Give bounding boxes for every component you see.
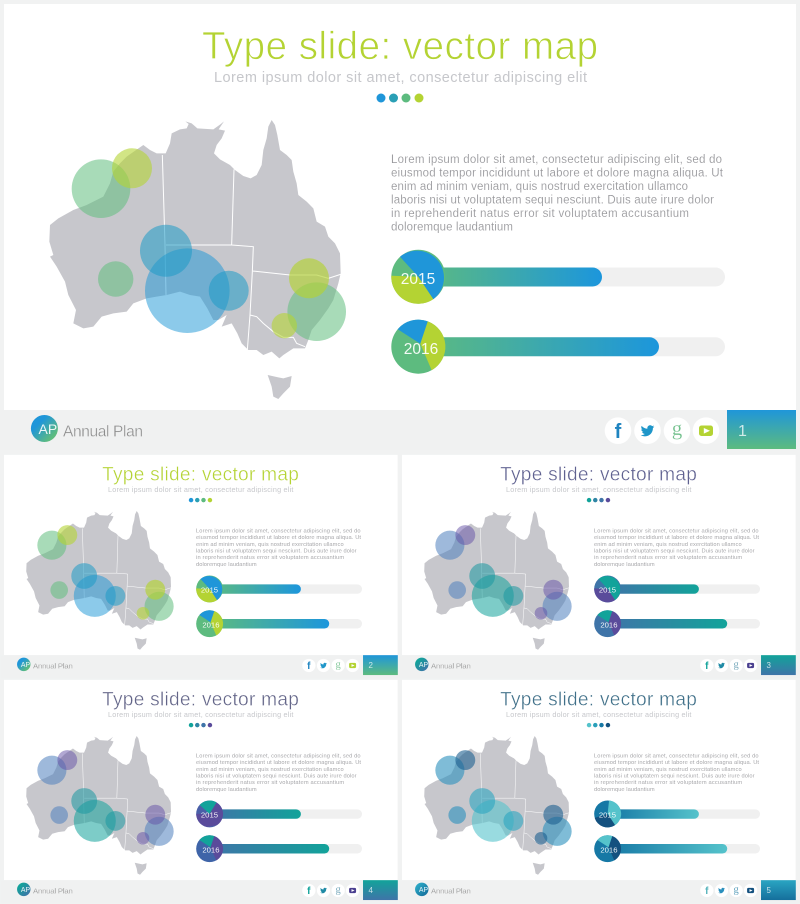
body text: in reprehenderit natus error sit voluptatem accusantium <box>391 208 689 220</box>
body text: Lorem ipsum dolor sit amet, consectetur adipiscing elit, sed do <box>594 528 759 534</box>
progress bar 2015 <box>196 576 362 602</box>
social icons: f <box>307 886 311 897</box>
social icons: g <box>734 660 740 671</box>
body text: enim ad minim veniam, quis nostrud exercitation ullamco <box>594 767 742 773</box>
body text <box>391 154 724 234</box>
social icons: f <box>705 661 709 672</box>
logo <box>31 415 58 442</box>
social icons: f <box>615 421 622 443</box>
body text: doloremque laudantium <box>196 562 257 568</box>
progress bar 2015: 2015 <box>201 586 218 595</box>
body text: in reprehenderit natus error sit voluptatem accusantium <box>594 780 742 786</box>
body text <box>196 753 361 793</box>
body text: laboris nisi ut voluptatem sequi nesciunt. Duis aute irure dolor <box>594 774 755 780</box>
logo: AP <box>419 662 428 669</box>
footer band <box>398 655 800 678</box>
footer band <box>0 655 398 678</box>
logo: AP <box>38 421 57 437</box>
logo: AP <box>21 887 30 894</box>
indicator dots <box>189 498 212 502</box>
indicator dots <box>376 94 424 102</box>
subtitle: Lorem ipsum dolor sit amet, consectetur adipiscing elit <box>108 485 293 494</box>
indicator dots <box>587 498 610 502</box>
progress bar 2016 <box>594 610 760 637</box>
brand name: Annual Plan <box>63 424 143 440</box>
progress bar 2015 <box>594 576 760 602</box>
body text: enim ad minim veniam, quis nostrud exercitation ullamco <box>196 542 344 548</box>
progress bar 2015 <box>196 801 362 827</box>
page number: 2 <box>368 661 373 670</box>
brand name: Annual Plan <box>431 886 471 895</box>
brand name: Annual Plan <box>33 661 73 670</box>
title: Type slide: vector map <box>202 25 598 68</box>
page number <box>761 655 796 675</box>
body text: laboris nisi ut voluptatem sequi nesciunt. Duis aute irure dolor <box>196 549 357 555</box>
panel: slide 3 <box>398 455 800 678</box>
body text: doloremque laudantium <box>196 787 257 793</box>
map of Australia with bubbles <box>26 511 174 650</box>
progress bar 2015: 2015 <box>599 811 616 820</box>
logo: AP <box>21 662 30 669</box>
subtitle: Lorem ipsum dolor sit amet, consectetur adipiscing elit <box>214 70 587 86</box>
body text: Lorem ipsum dolor sit amet, consectetur adipiscing elit, sed do <box>594 753 759 759</box>
social icons: g <box>336 660 342 671</box>
body text: eiusmod tempor incididunt ut labore et dolore magna aliqua. Ut <box>196 535 361 541</box>
title: Type slide: vector map <box>500 465 697 486</box>
footer band <box>0 410 800 450</box>
indicator dots <box>189 723 212 727</box>
map of Australia with bubbles <box>49 120 346 399</box>
body text: eiusmod tempor incididunt ut labore et dolore magna aliqua. Ut <box>594 535 759 541</box>
map of Australia with bubbles <box>26 736 174 875</box>
panel: slide 5 <box>398 680 800 903</box>
body text: enim ad minim veniam, quis nostrud exercitation ullamco <box>594 542 742 548</box>
social icons: f <box>307 661 311 672</box>
progress bar 2016: 2016 <box>404 341 438 358</box>
title: Type slide: vector map <box>102 690 299 711</box>
progress bar 2016 <box>196 835 362 862</box>
body text: doloremque laudantium <box>594 562 655 568</box>
social icons <box>302 659 359 672</box>
body text: Lorem ipsum dolor sit amet, consectetur adipiscing elit, sed do <box>196 753 361 759</box>
page number: 4 <box>368 886 373 895</box>
brand name: Annual Plan <box>431 661 471 670</box>
body text: eiusmod tempor incididunt ut labore et dolore magna aliqua. Ut <box>391 168 724 180</box>
progress bar 2016: 2016 <box>202 620 219 629</box>
social icons: g <box>734 885 740 896</box>
page number <box>363 655 398 675</box>
body text: Lorem ipsum dolor sit amet, consectetur adipiscing elit, sed do <box>196 528 361 534</box>
brand name: Annual Plan <box>33 886 73 895</box>
body text: laboris nisi ut voluptatem sequi nesciunt. Duis aute irure dolor <box>594 549 755 555</box>
footer band <box>0 880 398 903</box>
social icons: g <box>672 416 683 440</box>
logo <box>17 658 30 671</box>
subtitle: Lorem ipsum dolor sit amet, consectetur adipiscing elit <box>108 710 293 719</box>
logo: AP <box>419 887 428 894</box>
body text: doloremque laudantium <box>594 787 655 793</box>
social icons <box>700 659 757 672</box>
page number <box>363 880 398 900</box>
body text: in reprehenderit natus error sit voluptatem accusantium <box>196 780 344 786</box>
body text: enim ad minim veniam, quis nostrud exercitation ullamco <box>391 181 688 193</box>
logo <box>17 883 30 896</box>
body text: doloremque laudantium <box>391 222 513 234</box>
body text: laboris nisi ut voluptatem sequi nesciunt. Duis aute irure dolor <box>391 194 714 206</box>
page number: 3 <box>766 661 771 670</box>
body text: laboris nisi ut voluptatem sequi nesciunt. Duis aute irure dolor <box>196 774 357 780</box>
logo <box>415 658 428 671</box>
map of Australia with bubbles <box>424 511 572 650</box>
logo <box>415 883 428 896</box>
social icons: g <box>336 885 342 896</box>
progress bar 2015 <box>594 801 760 827</box>
progress bar 2015: 2015 <box>599 586 616 595</box>
body text <box>594 753 759 793</box>
progress bar 2016: 2016 <box>600 620 617 629</box>
title: Type slide: vector map <box>102 465 299 486</box>
subtitle: Lorem ipsum dolor sit amet, consectetur adipiscing elit <box>506 485 691 494</box>
progress bar 2016 <box>594 835 760 862</box>
body text: enim ad minim veniam, quis nostrud exercitation ullamco <box>196 767 344 773</box>
progress bar 2016 <box>391 320 725 374</box>
page number <box>727 410 796 449</box>
progress bar 2016: 2016 <box>202 845 219 854</box>
subtitle: Lorem ipsum dolor sit amet, consectetur adipiscing elit <box>506 710 691 719</box>
body text: in reprehenderit natus error sit voluptatem accusantium <box>594 555 742 561</box>
page number <box>761 880 796 900</box>
body text <box>196 528 361 568</box>
social icons <box>700 884 757 897</box>
page number: 5 <box>766 886 771 895</box>
title: Type slide: vector map <box>500 690 697 711</box>
social icons: f <box>705 886 709 897</box>
social icons <box>605 416 719 444</box>
progress bar 2015 <box>391 250 725 304</box>
panel: slide 4 <box>0 680 398 903</box>
progress bar 2015: 2015 <box>401 271 435 288</box>
map of Australia with bubbles <box>424 736 572 875</box>
progress bar 2015: 2015 <box>201 811 218 820</box>
footer band <box>398 880 800 903</box>
progress bar 2016 <box>196 610 362 637</box>
progress bar 2016: 2016 <box>600 845 617 854</box>
panel: slide 1 <box>0 4 800 450</box>
body text: eiusmod tempor incididunt ut labore et dolore magna aliqua. Ut <box>196 760 361 766</box>
indicator dots <box>587 723 610 727</box>
body text: in reprehenderit natus error sit voluptatem accusantium <box>196 555 344 561</box>
page number: 1 <box>738 423 747 440</box>
panel: slide 2 <box>0 455 398 678</box>
body text <box>594 528 759 568</box>
body text: eiusmod tempor incididunt ut labore et dolore magna aliqua. Ut <box>594 760 759 766</box>
body text: Lorem ipsum dolor sit amet, consectetur adipiscing elit, sed do <box>391 154 722 166</box>
social icons <box>302 884 359 897</box>
